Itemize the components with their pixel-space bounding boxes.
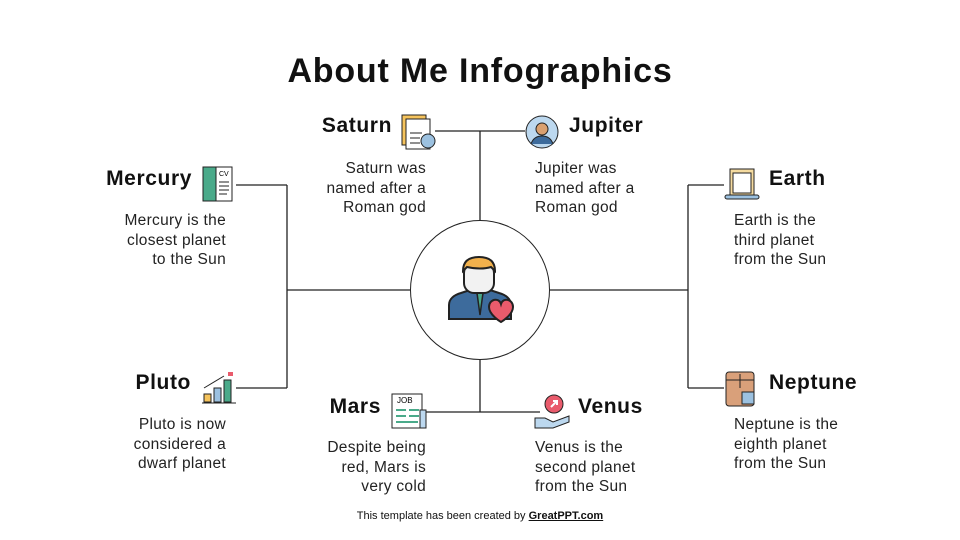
- icon: envelope: [726, 372, 754, 406]
- text: Saturn was: [345, 160, 426, 177]
- icon: CV: [202, 166, 232, 202]
- text: Pluto: [136, 371, 191, 394]
- footer: This template has been created by GreatPPT.com: [357, 510, 603, 522]
- icon: documents: [402, 114, 436, 150]
- item: Mars: [327, 394, 426, 495]
- text: Saturn: [322, 114, 392, 137]
- text: Roman god: [343, 199, 426, 216]
- icon: CV: CV: [219, 171, 229, 178]
- text: Neptune is the: [734, 416, 838, 433]
- title: About Me Infographics: [287, 52, 673, 90]
- item: Venus: [534, 394, 643, 495]
- item: Pluto: [134, 371, 236, 472]
- icon: growth chart: [202, 372, 236, 404]
- text: Mercury is the: [124, 212, 226, 229]
- text: dwarf planet: [138, 455, 226, 472]
- text: Venus is the: [535, 439, 623, 456]
- text: from the Sun: [734, 455, 826, 472]
- text: closest planet: [127, 232, 226, 248]
- text: to the Sun: [152, 251, 226, 268]
- icon: job newspaper: JOB: [397, 396, 413, 405]
- item: Saturn: [322, 114, 436, 216]
- text: Despite being: [327, 439, 426, 456]
- item: Neptune: [726, 371, 857, 472]
- text: third planet: [734, 232, 814, 248]
- icon: laptop profile: [724, 168, 760, 200]
- text: Venus: [578, 395, 643, 418]
- text: Mercury: [106, 167, 192, 190]
- icon: avatar: [526, 116, 558, 148]
- icon: hand with badge: [534, 394, 570, 428]
- item: Jupiter: [526, 114, 643, 216]
- text: Earth: [769, 167, 826, 190]
- text: named after a: [535, 180, 635, 196]
- text: Jupiter was: [535, 160, 617, 177]
- text: eighth planet: [734, 436, 827, 452]
- text: Jupiter: [569, 114, 643, 137]
- text: considered a: [134, 436, 226, 452]
- text: red, Mars is: [341, 458, 426, 476]
- text: Earth is the: [734, 212, 816, 229]
- item: Earth: [724, 167, 826, 268]
- text: Neptune: [769, 371, 857, 394]
- text: Roman god: [535, 199, 618, 216]
- text: Mars: [330, 395, 381, 418]
- icon: job newspaper: [392, 394, 426, 428]
- text: Pluto is now: [139, 416, 226, 433]
- item: Mercury: [106, 166, 232, 268]
- text: named after a: [326, 180, 426, 196]
- text: from the Sun: [734, 251, 826, 268]
- text: second planet: [535, 458, 635, 476]
- text: from the Sun: [535, 478, 627, 495]
- center circle with person icon: [410, 220, 550, 360]
- text: very cold: [361, 478, 426, 495]
